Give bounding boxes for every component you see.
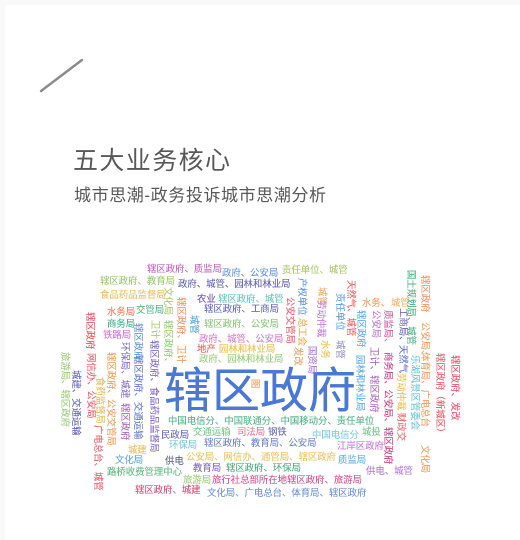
horizontal words, lower: 质监局 — [338, 454, 366, 465]
vertical words, left: 网信办、公安局 — [86, 353, 97, 419]
vertical words, right: 工商局、 — [398, 308, 409, 346]
vertical words, left: 城建、交通运输 — [71, 370, 82, 436]
vertical words, right: 劳动仲裁 — [316, 300, 327, 338]
vertical words, left: 卫计 — [150, 320, 161, 339]
horizontal words, upper: 地产 — [197, 343, 216, 354]
vertical words, left: 辖区政府 — [85, 312, 96, 350]
vertical words, right: 辖区政府、发改 — [450, 355, 461, 421]
horizontal words, lower: 城投 — [362, 426, 381, 437]
vertical words, left: 辖区政府、 — [176, 297, 187, 344]
horizontal words, lower: 城建 — [128, 444, 147, 455]
vertical words, right: 财政交 — [396, 413, 407, 441]
horizontal words, upper: 城管 — [391, 297, 410, 308]
vertical words, left: 辖区政府 — [120, 403, 131, 441]
vertical words, right: 公安局 — [371, 310, 382, 338]
vertical words, right: 国土规划局、城管 — [406, 270, 417, 345]
horizontal words, lower: 旅游局 — [183, 474, 211, 485]
horizontal words, upper: 商务局 — [107, 318, 135, 329]
horizontal words, lower — [107, 415, 413, 498]
vertical words, left: 食药监督局 — [95, 377, 106, 424]
horizontal words, lower: 中国电信分、中国联通分、中国移动分、责任单位 — [168, 415, 374, 426]
vertical words, left: 辖区政府、交通运输 — [133, 355, 144, 440]
vertical words, left: 城管 — [189, 315, 200, 334]
horizontal words, upper: 铁路局 — [103, 329, 131, 340]
vertical words, left: 辖区政府、食品药品监督局 — [149, 340, 160, 453]
horizontal words, lower: 供电、城管 — [366, 465, 413, 476]
vertical words, left: 旅游局、辖区政府 — [60, 352, 71, 427]
horizontal words, lower: 教育局 — [193, 462, 221, 473]
vertical words, right: 商务局、公安局、辖区政府 — [383, 352, 394, 465]
horizontal words, lower: 民政局 — [161, 429, 189, 440]
vertical words, left: 辖区政府、公安交管局 — [106, 352, 117, 446]
horizontal words, lower: 公安局、网信办、通管局、辖区政府 — [186, 451, 336, 462]
horizontal words, upper: 交管局 — [136, 304, 164, 315]
horizontal words, upper: 水务、 — [362, 297, 390, 308]
horizontal words, lower: 江岸区政府 — [337, 440, 384, 451]
horizontal words, lower: 中国电信分 — [312, 429, 359, 440]
horizontal words, upper: 园林和林业局 — [219, 343, 275, 354]
horizontal words, upper: 辖区政府、城管 — [218, 293, 284, 304]
horizontal words, upper — [100, 263, 410, 364]
vertical words, right: 文化局 — [420, 445, 431, 473]
central word: 辖区政府 — [164, 365, 356, 418]
horizontal words, lower: 旅行社总部所在地辖区政府、旅游局 — [212, 474, 362, 485]
horizontal words, upper: 辖区政府、公安局 — [204, 318, 279, 329]
horizontal words, upper: 辖区政府、教育局 — [100, 275, 175, 286]
vertical words, right: 发改 — [293, 347, 304, 366]
horizontal words, upper: 政府、城管、公安局 — [199, 333, 283, 344]
vertical words, right: 城管 — [317, 287, 328, 306]
vertical words, right: 质监局、 — [383, 310, 394, 348]
vertical words, right: 卫计、辖区政府 — [369, 347, 380, 413]
title: 五大业务核心 — [73, 147, 231, 175]
vertical words, left: 环保局、城建 — [120, 342, 131, 398]
vertical words, right: 天然气、城管 — [346, 280, 357, 336]
vertical words, right: 公安交管局 — [285, 297, 296, 344]
horizontal words, upper: 农业 — [197, 293, 216, 304]
horizontal words, upper: 政府、城管、园林和林业局 — [178, 278, 291, 289]
vertical words, left: 图 — [250, 379, 261, 388]
vertical words, right: 国资局 — [307, 346, 318, 374]
vertical words, right: 产权单位 — [297, 278, 308, 316]
horizontal words, lower: 文化局 — [115, 454, 143, 465]
horizontal words, lower: 路桥收费管理中心 — [107, 466, 183, 477]
horizontal words, lower: 供电 — [165, 455, 184, 466]
vertical words, right: 天然气 — [398, 345, 409, 374]
horizontal words, lower: 钢铁 — [268, 426, 287, 437]
vertical words, left: 文化局 — [163, 287, 174, 315]
horizontal words, lower: 辖区政府、环保局 — [226, 462, 301, 473]
vertical words, right: 劳动仲裁 — [396, 373, 407, 411]
vertical words, right: 辖区政府（新城区） — [435, 353, 446, 437]
horizontal words, upper: 辖区政府、工商局 — [204, 303, 279, 314]
vertical words, left: 辖区政府、 — [163, 320, 174, 367]
horizontal words, upper: 辖区政府、质监局 — [147, 263, 222, 274]
vertical words, right: 乐湖风景区管委会 — [410, 355, 421, 431]
vertical words, right: 公安局、 — [420, 322, 431, 360]
vertical words, right: 辖区政府 — [356, 310, 367, 348]
subtitle: 城市思潮-政务投诉城市思潮分析 — [74, 186, 327, 205]
vertical words, left — [60, 287, 261, 491]
vertical words, left: 辖区政府 — [133, 323, 144, 361]
word cloud — [60, 263, 461, 498]
vertical words, left: 广电总台、城管 — [93, 425, 104, 491]
horizontal words, lower: 交通运输 — [193, 426, 231, 437]
horizontal words, upper: 食品药品监督局 — [100, 289, 166, 300]
vertical words, right: 水务 — [320, 340, 331, 359]
horizontal words, lower: 辖区政府、教育局、公安局 — [204, 437, 317, 448]
horizontal words, lower: 辖区政府、城建 — [135, 484, 201, 495]
horizontal words, lower: 司法局 — [237, 426, 265, 437]
vertical words, right: 城管 — [335, 340, 346, 359]
horizontal words, upper: 水务局 — [107, 306, 135, 317]
vertical words, left: 卫计 — [176, 345, 187, 364]
horizontal words, lower: 文化局、广电总台、体育局、辖区政府 — [207, 487, 366, 498]
vertical words, right: 责任单位 — [335, 293, 346, 331]
icon: diagonal line — [41, 60, 82, 91]
vertical words, right: 总工会 — [297, 318, 308, 347]
vertical words, right — [285, 270, 461, 473]
horizontal words, upper: 政府、园林和林业局 — [199, 353, 283, 364]
vertical words, right: 辖区政府 — [420, 275, 431, 313]
vertical words, right: 园林和林业局 — [355, 355, 366, 411]
horizontal words, lower: 环保局 — [169, 439, 197, 450]
horizontal words, upper: 责任单位、城管 — [282, 264, 348, 275]
horizontal words, upper: 政府、公安局 — [222, 267, 278, 278]
vertical words, right: 体育局、广电总台 — [420, 352, 431, 427]
